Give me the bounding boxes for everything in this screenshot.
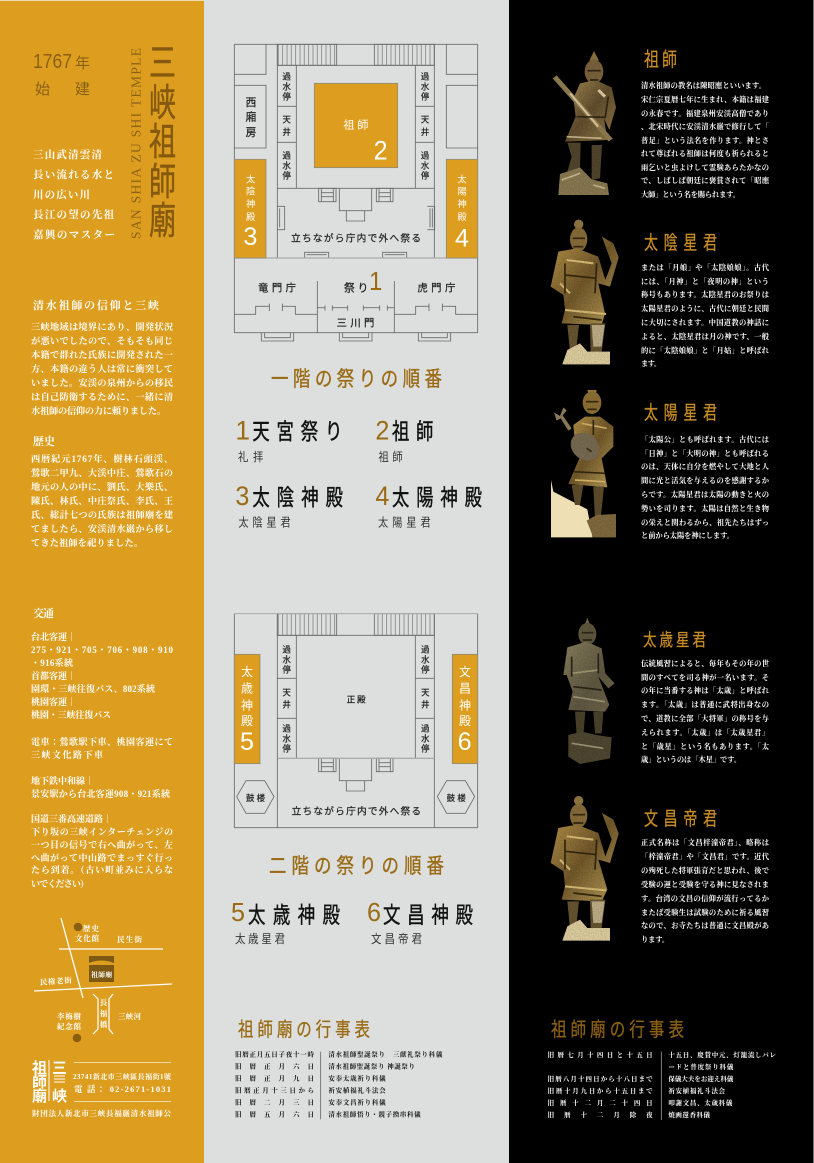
text block: faith: 本籍で群れた氏族に開発された一 bbox=[31, 349, 173, 360]
text block: faith: 方、本籍の違う人は常に衝突して bbox=[31, 363, 173, 374]
bio text: 太陰星君: に大切にされます。中国道教の神話に bbox=[641, 318, 769, 327]
table: event calendar, grey panel: 清水祖師悟り・親子換串科儀 bbox=[328, 1110, 421, 1119]
text block: history: てましたら、安渓清水巌から移し bbox=[31, 523, 173, 534]
floor plan: second floor: 立ちながら庁内で外へ祭る bbox=[292, 805, 421, 817]
table: event calendar, grey panel: 旧暦正月五日子夜十一時 bbox=[235, 1050, 315, 1059]
bio heading: 文昌帝君: 文昌帝君 bbox=[644, 808, 717, 830]
orange room: hall 4 bbox=[446, 159, 478, 258]
orange room: hall 5: 太歳神殿 bbox=[241, 664, 253, 728]
title: temple name: 三 bbox=[149, 41, 176, 84]
list: first floor festival order bbox=[235, 415, 482, 530]
table: event calendar, black panel: 十五日、慶賛中元、灯籠流しパレ bbox=[668, 1050, 777, 1059]
text block: transport: 一つ目の信号で右へ曲がって、左 bbox=[31, 839, 173, 850]
text block: transport: 台北客運｜ bbox=[31, 631, 76, 642]
floor plan: second floor: 鼓楼 bbox=[447, 793, 466, 803]
table: event calendar, black panel: 保儀大夫をお迎え科儀 bbox=[668, 1074, 734, 1083]
heading: first floor festival order: 一階の祭りの順番 bbox=[271, 368, 442, 391]
bio text: 祖師 bbox=[641, 81, 770, 199]
poem text block: 長江の望の先祖 bbox=[33, 208, 114, 221]
bio text: 太歳星君: と「歳星」という名もあります。「太 bbox=[641, 742, 770, 751]
room labels: 過水停 bbox=[282, 150, 291, 180]
bio text: 太陰星君: 的に「太陰娘娘」と「月姑」と呼ばれ bbox=[641, 346, 770, 355]
table: event calendar, grey panel: 旧暦五月六日 bbox=[235, 1110, 314, 1119]
bio text: 太歳星君: 伝統風習によると、毎年もその年の世 bbox=[641, 659, 770, 668]
floor plan: first floor: 三川門 bbox=[337, 318, 374, 330]
room labels: 過水停 bbox=[421, 724, 430, 754]
text block: history: 陳氏、林氏、中庄祭氏、李氏、王 bbox=[31, 495, 173, 506]
text block: transport: たら到着。（古い町並みに入らな bbox=[31, 864, 173, 875]
list: first floor festival order: 2 bbox=[375, 415, 389, 445]
list: first floor festival order: 祖師 bbox=[392, 419, 433, 445]
text block: transport: ・916系統 bbox=[31, 657, 74, 668]
poem text block: 長い流れる水と bbox=[33, 168, 114, 181]
text block: transport: 下り坂の三峡インターチェンジの bbox=[31, 826, 173, 837]
statue: 太歳星君 bbox=[563, 618, 615, 764]
bio text: 祖師: 清水祖師の教名は陳昭應といいます。 bbox=[641, 81, 766, 90]
floor plan: first floor bbox=[234, 44, 478, 341]
bio text: 太陽星君: の栄えと関わるから、祖先たちはずっ bbox=[641, 518, 769, 527]
list: second floor festival order: 太歳星君 bbox=[235, 932, 285, 946]
orange room: hall 6: 6 bbox=[458, 728, 472, 756]
list: second floor festival order: 6 bbox=[367, 897, 381, 927]
list: first floor festival order: 4 bbox=[375, 481, 389, 511]
room labels: 過水停 bbox=[421, 645, 430, 675]
bio text: 祖師: で、しばしば朝廷に褒賞されて「昭應 bbox=[641, 176, 770, 185]
text block: transport: 桃園客運｜ bbox=[31, 696, 76, 707]
bio text: 文昌帝君: なので、お寺たちは普通に文昌殿があ bbox=[641, 921, 769, 930]
bio text: 太歳星君: で、道教に全部「大将軍」の称号を与 bbox=[641, 714, 770, 723]
text block: history: 鶯歌二甲九、大渓中庄、鶯歌石の bbox=[31, 467, 173, 478]
logo and address: 電 話： 02-2671-1031 bbox=[74, 1084, 171, 1094]
bio text: 太陰星君: または「月娘」や「太陰娘娘」。古代 bbox=[641, 263, 770, 272]
bio text: 文昌帝君: す。台湾の文昌の信仰が流行ってるか bbox=[641, 894, 769, 903]
bio text: 太陽星君: らです。太陽星君は太陽の動きと火の bbox=[641, 490, 769, 499]
bio text: 太陽星君: のは、天体に自分を燃やして大地と人 bbox=[641, 462, 770, 471]
list: second floor festival order: 文昌帝君 bbox=[371, 931, 422, 946]
list: second floor festival order bbox=[231, 897, 473, 946]
panel: middle grey background bbox=[204, 0, 509, 1163]
title: temple name: 峡 bbox=[149, 81, 176, 124]
bio text: 太陽星君: と前から太陽を神にします。 bbox=[641, 531, 734, 540]
room labels: 過水停 bbox=[282, 645, 291, 675]
bio text: 太歳星君: ます。「太歳」は普通に武将出身なの bbox=[641, 700, 769, 709]
table: event calendar, grey panel: 旧暦二月三日 bbox=[235, 1098, 314, 1107]
text block: faith: は自己防衛するために、一緒に清 bbox=[31, 391, 173, 402]
text block: faith bbox=[31, 321, 173, 416]
bio text: 太歳星君: 間のすべてを司る神が一名います。そ bbox=[641, 673, 769, 682]
orange room: main hall 2: 祖師 bbox=[343, 118, 368, 132]
text block: transport: 首都客運｜ bbox=[31, 670, 76, 681]
title block: founding year bbox=[33, 51, 90, 98]
bio text: 太陽星君: 勢いを司ります。太陽は自然と生き物 bbox=[641, 504, 770, 513]
text block: transport: 国道三番高速道路｜ bbox=[31, 813, 112, 824]
map bbox=[34, 918, 172, 1042]
logo and address: 三 bbox=[52, 1060, 67, 1077]
logo and address bbox=[32, 1060, 172, 1118]
heading: event calendar, grey panel: 祖師廟の行事表 bbox=[238, 1018, 370, 1040]
table: event calendar, grey panel: 安奉太歳祈り科儀 bbox=[328, 1074, 386, 1083]
logo and address: 祖 bbox=[32, 1060, 47, 1077]
text block: transport: 275・921・705・706・908・910 bbox=[31, 645, 174, 655]
poem text block: 川の広い川 bbox=[33, 188, 90, 201]
title block: founding year: 年 bbox=[75, 55, 90, 72]
map: 民生街 bbox=[117, 934, 142, 944]
list: second floor festival order: 文昌神殿 bbox=[383, 903, 473, 929]
floor plan: first floor: 祭り bbox=[344, 282, 368, 295]
list: first floor festival order: 太陽神殿 bbox=[392, 485, 482, 511]
map: 文化館 bbox=[75, 933, 100, 943]
bio text: 太陽星君 bbox=[641, 435, 770, 540]
text block: history bbox=[31, 453, 174, 548]
text block: transport: 三峡文化路下車 bbox=[31, 749, 103, 760]
room labels: 天井 bbox=[282, 688, 291, 709]
table: event calendar, grey panel: 清水祖師聖誕祭り 三献礼祭り科儀 bbox=[328, 1050, 443, 1059]
bio text: 太陰星君: よると、太陰星君は月の神です、一般 bbox=[641, 332, 770, 341]
text block: history: 地元の人の中に、劉氏、大樂氏、 bbox=[31, 481, 173, 492]
title: temple name: 祖 bbox=[149, 120, 176, 163]
logo and address: 23741新北市三峡區長福街1號 bbox=[73, 1072, 171, 1081]
floor plan: second floor bbox=[234, 614, 478, 828]
room labels: 天井 bbox=[421, 688, 430, 709]
logo and address: 廟 bbox=[32, 1088, 47, 1105]
text block: history: てきた祖師を祀りました。 bbox=[31, 537, 143, 548]
text block: transport bbox=[31, 631, 174, 889]
title block: founding year: 建 bbox=[75, 81, 90, 98]
text block: faith: いました。安渓の泉州からの移民 bbox=[31, 377, 173, 388]
title: temple name: 廟 bbox=[149, 199, 176, 242]
title: English vertical name: SAN SHIA ZU SHI TEMPLE bbox=[128, 48, 144, 239]
list: first floor festival order: 太陰星君 bbox=[238, 516, 291, 530]
room labels: 過水停 bbox=[282, 724, 291, 754]
room labels: 天井 bbox=[282, 114, 291, 137]
bio text: 太陽星君: 間に光と活気を与えるのを感謝するか bbox=[641, 476, 769, 485]
table: event calendar, grey panel: 旧暦正月九日 bbox=[235, 1074, 314, 1083]
text block: history: 氏、総計七つの氏族は祖師廟を建 bbox=[31, 509, 174, 520]
title block: founding year: 始 bbox=[35, 81, 50, 98]
title: temple name bbox=[149, 41, 176, 242]
table: event calendar, grey panel: 旧暦正月六日 bbox=[235, 1062, 314, 1071]
text block: transport: 地下鉄中和線｜ bbox=[31, 775, 94, 786]
room labels bbox=[246, 71, 430, 180]
logo and address: 師 bbox=[32, 1074, 47, 1091]
table: event calendar, grey panel: 安奉文昌祈り科儀 bbox=[328, 1098, 386, 1107]
orange room: hall 4: 4 bbox=[455, 225, 469, 253]
table: event calendar, grey panel bbox=[235, 1050, 443, 1119]
bio text: 太歳星君: の年に当番する神は「太歳」と呼ばれ bbox=[641, 686, 770, 695]
list: first floor festival order: 天宮祭り bbox=[252, 419, 342, 445]
statue: 太陰星君 bbox=[551, 220, 619, 364]
orange room: hall 3 bbox=[234, 159, 266, 258]
orange room: hall 5: 5 bbox=[240, 728, 254, 756]
list: first floor festival order: 礼拝 bbox=[238, 449, 263, 464]
room labels bbox=[282, 645, 430, 754]
text block: faith: 三峡地域は境界にあり、開発状況 bbox=[31, 321, 173, 332]
bio text: 太陰星君 bbox=[641, 263, 770, 368]
bio text: 文昌帝君: またば受験生は試験のために祈る風習 bbox=[641, 908, 769, 917]
orange room: hall 6: 文昌神殿 bbox=[459, 665, 471, 728]
bio text: 祖師: 普足」という法名を作ります。神とさ bbox=[641, 136, 769, 145]
orange room: hall 4: 太陽神殿 bbox=[457, 173, 467, 222]
table: event calendar, grey panel: 旧暦正月十三日から bbox=[235, 1086, 314, 1095]
map: 民権老街 bbox=[39, 975, 73, 987]
map: 歴史 bbox=[83, 923, 100, 933]
text block: transport: 電車：鶯歌駅下車、桃園客運にて bbox=[31, 736, 173, 747]
table: event calendar, black panel: ードと普度祭り科儀 bbox=[668, 1062, 734, 1071]
bio text: 太歳星君: 歳」というのは「木星」です。 bbox=[641, 755, 741, 764]
statue: 太陽星君 bbox=[551, 390, 616, 537]
bio text: 祖師: れて尊ばれる祖師は何度も祈られると bbox=[641, 149, 769, 158]
heading: second floor festival order: 二階の祭りの順番 bbox=[269, 855, 444, 878]
poem text block: 三山武清雲清 bbox=[33, 148, 102, 161]
floor plan: first floor: 立ちながら庁内で外へ祭る bbox=[291, 233, 421, 245]
list: first floor festival order: 太陽星君 bbox=[378, 516, 431, 530]
bio text: 祖師: 、北宋時代に安渓清水巌で修行して「 bbox=[641, 122, 770, 131]
bio heading: 太陰星君: 太陰星君 bbox=[644, 232, 717, 254]
list: first floor festival order: 太陰神殿 bbox=[252, 485, 343, 511]
floor plan: first floor: 竜門庁 bbox=[258, 283, 296, 295]
table: event calendar, black panel: 旧暦十二月二十四日 bbox=[548, 1098, 653, 1107]
text block: transport: へ曲がって中山路でまっすぐ行っ bbox=[31, 852, 173, 863]
statue: 文昌帝君 bbox=[551, 796, 619, 941]
panel: left orange background bbox=[0, 0, 204, 1163]
orange room: hall 6 bbox=[452, 654, 478, 764]
floor plan: first floor: 虎門庁 bbox=[417, 283, 455, 295]
map: 紀念館 bbox=[57, 1021, 82, 1031]
table: event calendar, grey panel: 祈安植福礼斗法会 bbox=[328, 1086, 386, 1095]
bio text: 祖師: の永春です。福建泉州安渓高僧であり bbox=[641, 109, 769, 118]
table: event calendar, black panel: 旧暦十月九日から十五日まで bbox=[548, 1086, 653, 1095]
text block: transport: 園環・三峡往復バス、802系統 bbox=[31, 683, 156, 694]
text block: transport: 景安駅から台北客運908・921系統 bbox=[31, 788, 171, 799]
bio text: 文昌帝君: 正式名称は「文昌梓潼帝君」、略称は bbox=[641, 838, 769, 847]
map: 祖師廟 bbox=[91, 970, 112, 979]
list: second floor festival order: 5 bbox=[231, 897, 245, 927]
panel: right black background bbox=[509, 0, 814, 1163]
bio heading: 太歳星君: 太歳星君 bbox=[643, 630, 706, 650]
table: event calendar, grey panel: 清水祖師聖誕祭り 神誕祭り bbox=[328, 1062, 415, 1071]
bio text: 太歳星君: えられます。「太歳」は「太歳星君」 bbox=[641, 728, 769, 737]
floor plan: second floor: 鼓楼 bbox=[246, 793, 266, 803]
map: 長福橋 bbox=[100, 997, 108, 1029]
bio text: 文昌帝君: ります。 bbox=[641, 935, 669, 944]
bio text: 太陽星君: 「太陽公」とも呼ばれます。古代には bbox=[641, 435, 769, 444]
logo and address: 峡 bbox=[52, 1087, 67, 1105]
map: 李梅樹 bbox=[57, 1011, 82, 1021]
list: first floor festival order: 3 bbox=[235, 481, 249, 511]
list: first floor festival order: 1 bbox=[235, 415, 250, 445]
list: second floor festival order: 太歳神殿 bbox=[248, 903, 340, 929]
bio text: 文昌帝君: 受験の運と受験を守る神に見なされま bbox=[641, 880, 769, 889]
room labels: 過水停 bbox=[421, 150, 430, 180]
orange room: hall 5 bbox=[234, 654, 260, 764]
bio text: 太陰星君: 太陽星君のように、古代に朝廷と民間 bbox=[641, 304, 769, 313]
room labels: 西廂房 bbox=[246, 97, 257, 139]
title: temple name: 師 bbox=[149, 160, 176, 203]
orange room: hall 3: 太陰神殿 bbox=[246, 173, 256, 222]
heading: history: 歴史 bbox=[33, 434, 55, 448]
text block: faith: 水祖師の信仰の力に頼りました。 bbox=[31, 405, 166, 416]
poem text block bbox=[33, 148, 115, 241]
bio text: 文昌帝君: 「梓潼帝君」や「文昌君」です。近代 bbox=[641, 852, 770, 861]
bio text: 太陰星君: ます。 bbox=[641, 359, 661, 368]
text block: transport: 桃園・三峡往復バス bbox=[31, 709, 111, 720]
floor plan: first floor: 1 bbox=[369, 266, 382, 296]
table: event calendar, black panel: 祈安植福礼斗法会 bbox=[668, 1086, 726, 1095]
bio heading: 太陽星君: 太陽星君 bbox=[644, 402, 717, 424]
list: first floor festival order: 祖師 bbox=[378, 449, 403, 464]
text block: transport: いでください） bbox=[31, 879, 89, 889]
table: event calendar, black panel: 旧暦八月十四日から十八日まで bbox=[548, 1074, 653, 1083]
orange room: hall 3: 3 bbox=[243, 223, 257, 251]
table: event calendar, black panel: 旧暦十二月除夜 bbox=[548, 1110, 653, 1119]
table: event calendar, black panel: 叩謝文昌、太歳科儀 bbox=[668, 1098, 733, 1107]
bio text: 祖師: 雨乞いと虫よけして霊験あらたかなの bbox=[641, 163, 769, 172]
table: event calendar, black panel: 焼画還香科儀 bbox=[667, 1110, 711, 1119]
bio text: 祖師: 宋仁宗夏暦七年に生まれ、本籍は福建 bbox=[641, 95, 770, 104]
room labels: 天井 bbox=[421, 114, 430, 137]
room labels: 過水停 bbox=[421, 71, 430, 101]
heading: transport: 交通 bbox=[33, 606, 54, 620]
room labels: 過水停 bbox=[282, 71, 291, 101]
logo and address: 財団法人新北市三峡長福巌清水祖師公 bbox=[32, 1108, 172, 1118]
poem text block: 嘉興のマスター bbox=[33, 228, 115, 241]
table: event calendar, black panel bbox=[548, 1050, 777, 1120]
orange room: main hall 2: 2 bbox=[374, 135, 388, 165]
statue: 祖師 bbox=[553, 51, 616, 195]
bio text: 文昌帝君: の殉死した将軍張育だと思われ、後で bbox=[641, 866, 769, 875]
text block: history: 西暦紀元1767年、樹林石頭渓、 bbox=[31, 453, 173, 464]
floor plan: second floor: 正殿 bbox=[347, 694, 366, 704]
table: event calendar, black panel: 旧暦七月十四日と十五日 bbox=[548, 1050, 653, 1059]
bio text: 太陽星君: 「日神」と「大明の神」とも呼ばれる bbox=[641, 449, 769, 458]
bio text: 文昌帝君 bbox=[641, 838, 770, 944]
text block: faith: が悪いでしたので、そもそも同じ bbox=[31, 335, 173, 346]
bio text: 太陰星君: 称号もあります。太陰星君のお祭りは bbox=[641, 290, 769, 299]
bio text: 祖師: 大師」という名を賜られます。 bbox=[641, 190, 740, 199]
bio heading: 祖師: 祖師 bbox=[644, 48, 677, 70]
title block: founding year: 1767 bbox=[33, 51, 72, 73]
heading: faith: 清水祖師の信仰と三峡 bbox=[33, 298, 159, 312]
bio text: 太陰星君: には、「月神」と「夜明の神」という bbox=[641, 277, 769, 286]
bio text: 太歳星君 bbox=[641, 659, 770, 764]
orange room: main hall 2 bbox=[314, 83, 398, 168]
heading: event calendar, black panel: 祖師廟の行事表 bbox=[551, 1018, 684, 1040]
map: 三峡河 bbox=[118, 1011, 142, 1021]
